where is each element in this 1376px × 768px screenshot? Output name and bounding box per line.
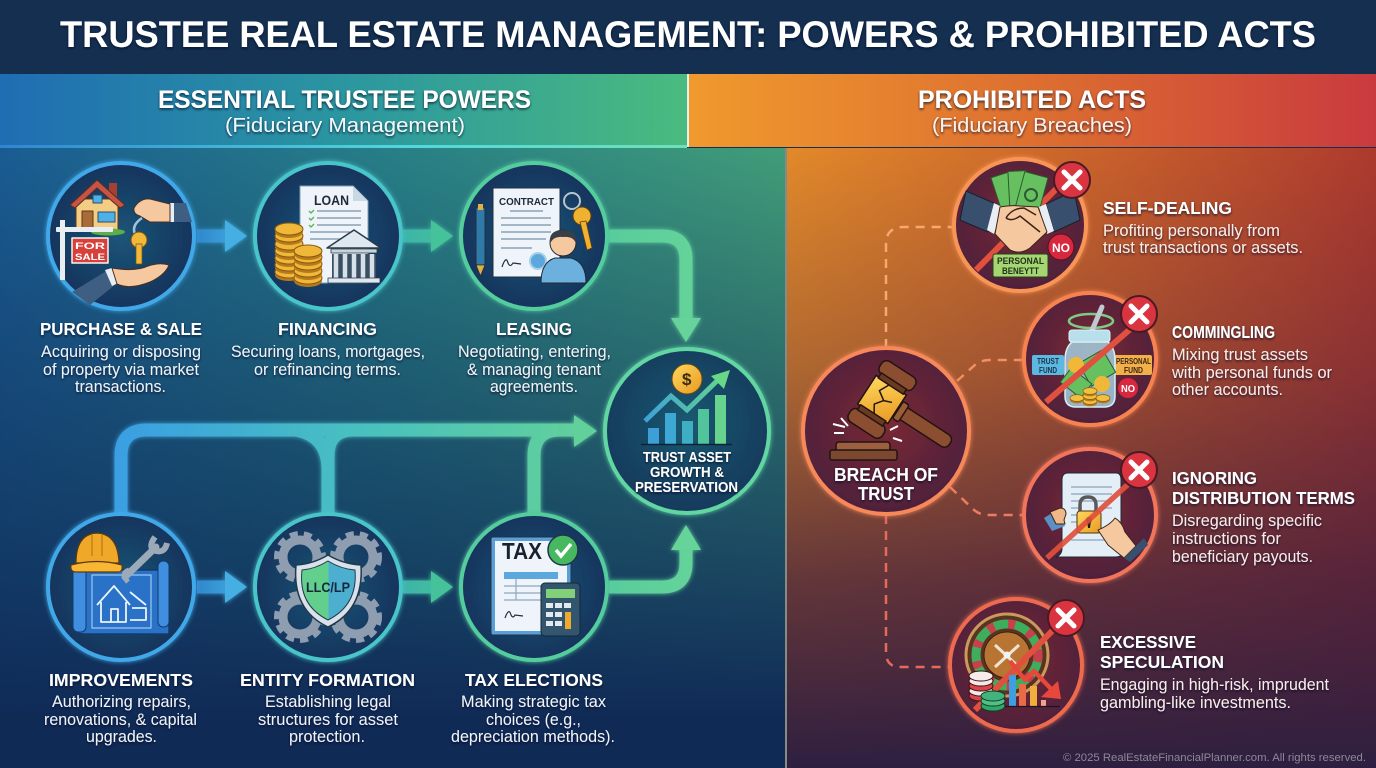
label [40, 319, 202, 396]
panel: powers [0, 148, 785, 768]
icon: jar of mixed funds: TRUST [1037, 357, 1059, 366]
label: or refinancing terms. [254, 360, 401, 379]
label: BREACH OF [834, 464, 938, 485]
text: gambling-like investments. [1100, 693, 1291, 712]
section header: essential trustee powers: (Fiduciary Management) [225, 115, 465, 137]
label: PRESERVATION [635, 480, 738, 496]
label: Establishing legal [265, 692, 391, 711]
icon: roulette wheel, chips, falling chart [966, 614, 1061, 711]
label: PURCHASE & SALE [40, 319, 202, 339]
node: entity formation [240, 514, 415, 746]
section header: prohibited acts [687, 74, 1376, 147]
label: structures for asset [258, 710, 398, 729]
label: transactions. [75, 377, 166, 396]
icon: loan document, coins, bank [275, 186, 381, 287]
node: tax elections [451, 514, 615, 746]
label [44, 670, 197, 746]
text: EXCESSIVE [1100, 632, 1196, 652]
icon: handshake with cash [960, 171, 1080, 277]
icon: handshake with cash: NO [1052, 241, 1070, 255]
icon: contract, pen, key, tenant: CONTRACT [499, 196, 555, 208]
icon: cracked gavel [830, 358, 970, 474]
text: SPECULATION [1100, 652, 1224, 672]
text: Engaging in high-risk, imprudent [1100, 675, 1329, 694]
node: leasing [458, 163, 611, 396]
text: SELF-DEALING [1103, 198, 1232, 218]
icon: x badge [1054, 162, 1090, 198]
icon: house with for sale sign and keys: SALE [75, 252, 105, 263]
title bar [0, 0, 1376, 74]
label: agreements. [490, 377, 578, 396]
icon: tax form, check badge, calculator [491, 535, 580, 636]
section header: prohibited acts: PROHIBITED ACTS [918, 86, 1146, 114]
node: trust asset growth [605, 349, 769, 513]
node: financing [231, 163, 425, 379]
text: instructions for [1172, 529, 1281, 548]
footer copyright: © 2025 RealEstateFinancialPlanner.com. All rights reserved. [1063, 752, 1366, 764]
item: self-dealing [954, 159, 1303, 291]
icon: x badge [1048, 600, 1084, 636]
node: improvements [44, 514, 197, 746]
icon: growth chart with coin [641, 364, 732, 444]
label: Acquiring or disposing [41, 342, 201, 361]
item: commingling [1024, 293, 1332, 425]
item: excessive speculation [950, 599, 1329, 731]
text: trust transactions or assets. [1103, 238, 1303, 257]
text [1103, 198, 1303, 257]
text: Disregarding specific [1172, 511, 1322, 530]
icon: x badge [1121, 452, 1157, 488]
label: choices (e.g., [486, 710, 581, 729]
label [458, 319, 611, 396]
icon: gears and shield [277, 534, 379, 640]
title: TRUSTEE REAL ESTATE MANAGEMENT: POWERS & PROHIBITED ACTS [60, 14, 1316, 55]
flow arrows [121, 220, 701, 603]
text [1172, 468, 1355, 566]
icon: jar of mixed funds: FUND [1124, 366, 1143, 375]
label [231, 319, 425, 379]
label: Authorizing repairs, [52, 692, 191, 711]
icon: x badge [1121, 296, 1157, 332]
label: GROWTH & [650, 465, 724, 481]
text: IGNORING [1172, 468, 1257, 488]
label: protection. [289, 727, 365, 746]
text: with personal funds or [1171, 363, 1332, 382]
icon: loan document, coins, bank: LOAN [314, 192, 349, 208]
label: & managing tenant [467, 360, 601, 379]
label: of property via market [43, 360, 199, 379]
panel: prohibited acts [787, 148, 1376, 768]
section header: prohibited acts: (Fiduciary Breaches) [932, 115, 1132, 137]
label: renovations, & capital [44, 710, 197, 729]
label: TAX ELECTIONS [465, 670, 603, 690]
icon: locked document and hands [1044, 473, 1148, 562]
text: beneficiary payouts. [1172, 547, 1313, 566]
text: Profiting personally from [1103, 221, 1280, 240]
icon: jar of mixed funds: PERSONAL [1116, 357, 1151, 366]
icon: jar of mixed funds [1032, 307, 1152, 407]
text [1171, 322, 1332, 399]
label: depreciation methods). [451, 727, 615, 746]
section header: essential trustee powers: ESSENTIAL TRUSTEE POWERS [158, 86, 531, 114]
icon: jar of mixed funds: FUND [1039, 366, 1057, 375]
icon: house with for sale sign and keys: FOR [75, 241, 105, 252]
label: Making strategic tax [461, 692, 606, 711]
dashed connectors [886, 227, 1023, 667]
label [635, 450, 738, 496]
icon: gears and shield: LLC/LP [306, 579, 350, 595]
text: COMMINGLING [1172, 322, 1275, 342]
label: FINANCING [278, 319, 377, 339]
icon: hard hat, wrench, blueprint [71, 533, 169, 634]
icon: handshake with cash: PERSONAL [997, 256, 1044, 266]
icon: contract, pen, key, tenant [476, 188, 592, 283]
icon: growth chart with coin: $ [682, 370, 692, 389]
label: Securing loans, mortgages, [231, 342, 425, 361]
text [1100, 632, 1329, 712]
icon: tax form, check badge, calculator: TAX [502, 538, 543, 564]
item: ignoring distribution terms [1024, 449, 1355, 581]
label: TRUST [858, 483, 915, 504]
label: Negotiating, entering, [458, 342, 611, 361]
label: upgrades. [86, 727, 157, 746]
node: purchase & sale [40, 163, 202, 396]
label: ENTITY FORMATION [240, 670, 415, 690]
icon: jar of mixed funds: NO [1121, 384, 1135, 395]
label: IMPROVEMENTS [49, 670, 193, 690]
node: breach of trust [803, 348, 970, 514]
label [834, 464, 938, 504]
text: DISTRIBUTION TERMS [1172, 488, 1355, 508]
label [451, 670, 615, 746]
text: Mixing trust assets [1172, 345, 1308, 364]
label: LEASING [496, 319, 572, 339]
icon: handshake with cash: BENEYTT [1002, 266, 1039, 276]
label: TRUST ASSET [643, 450, 731, 466]
section header: essential trustee powers [0, 74, 687, 147]
label [240, 670, 415, 746]
icon: house with for sale sign and keys [56, 180, 192, 305]
text: other accounts. [1172, 380, 1283, 399]
